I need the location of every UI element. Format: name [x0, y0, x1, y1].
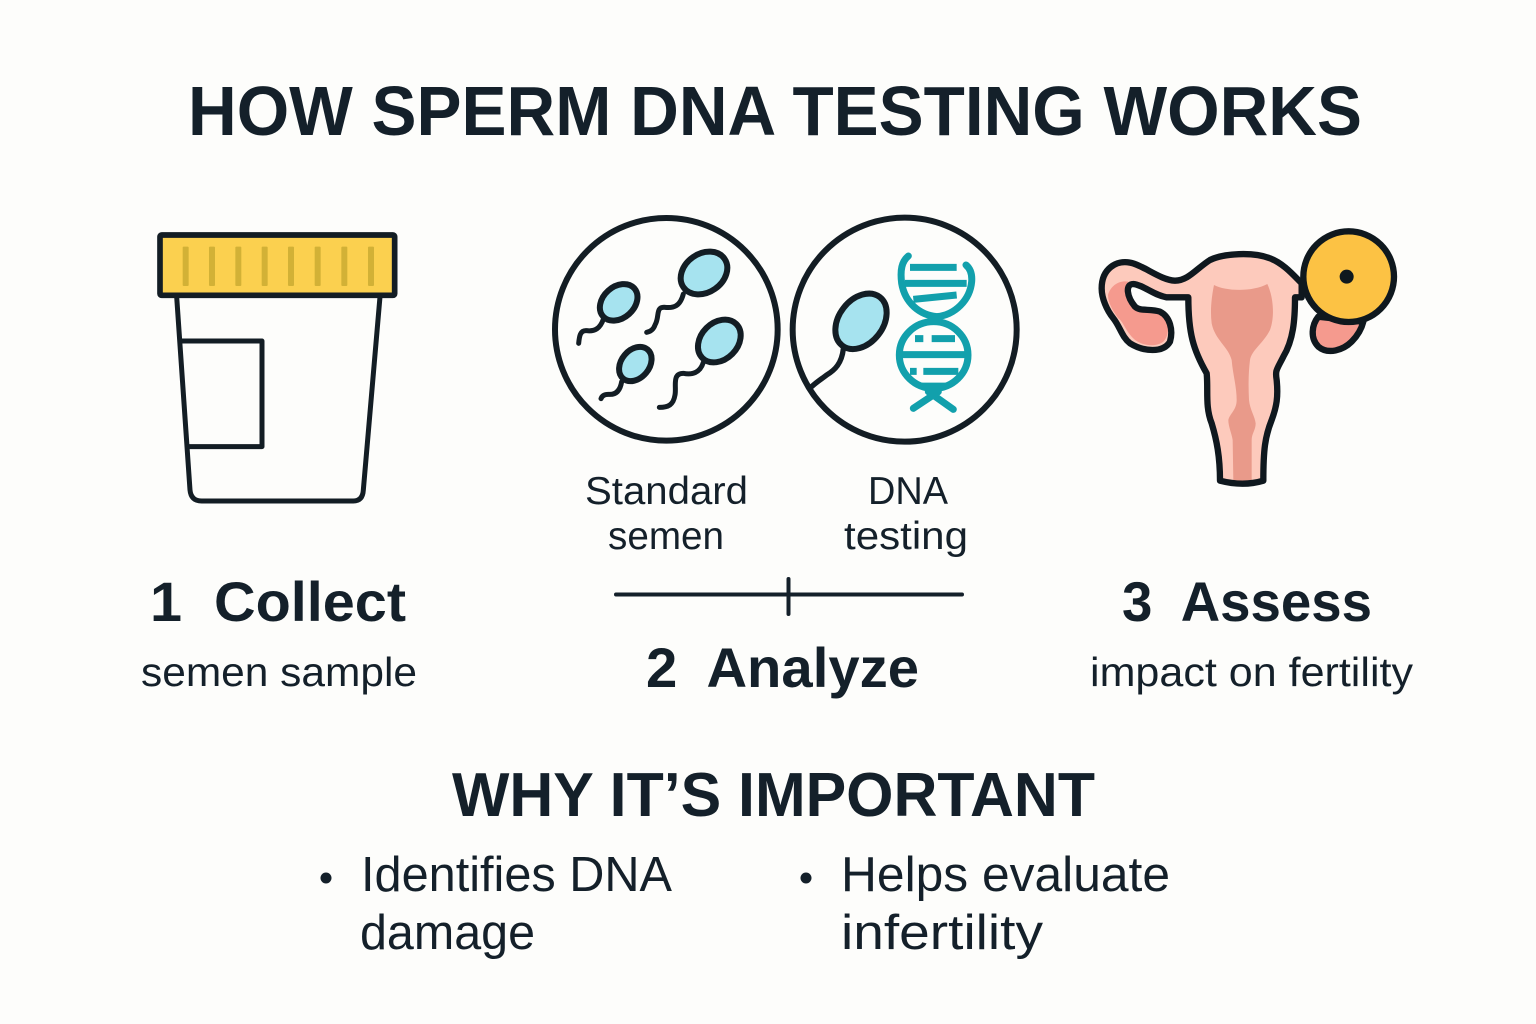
heading: why it's important: WHY IT’S IMPORTANT [452, 761, 1095, 830]
label: standard semen: Standard [585, 470, 748, 513]
title: HOW SPERM DNA TESTING WORKS [188, 72, 1362, 150]
step 2: analyze [555, 218, 1017, 699]
icon: uterus with highlighted ovary [1102, 231, 1394, 484]
label: DNA testing: DNA [868, 470, 948, 513]
step 1 heading: 1 Collect [150, 570, 406, 633]
bullet: identifies DNA damage: Identifies DNA [361, 848, 672, 902]
bullet: helps evaluate infertility [800, 848, 1170, 960]
label: standard semen: semen [608, 515, 724, 558]
step 3 heading: 3 Assess [1122, 570, 1372, 633]
step 3: assess [1090, 231, 1414, 695]
bullet: helps evaluate infertility: infertility [841, 906, 1044, 960]
step 1: collect [141, 235, 417, 695]
step 2 heading: 2 Analyze [646, 636, 919, 699]
label: standard semen [585, 470, 748, 558]
label: DNA testing: testing [844, 515, 968, 558]
icon: specimen cup [160, 235, 395, 501]
icon: DNA testing circle [793, 218, 1017, 442]
bullet: identifies DNA damage [320, 848, 672, 960]
step 1 caption: semen sample [141, 649, 417, 695]
bracket line [616, 579, 962, 614]
label: DNA testing [844, 470, 968, 558]
bullet: identifies DNA damage: damage [360, 906, 535, 960]
bullet: helps evaluate infertility: Helps evaluate [841, 848, 1170, 902]
step 3 caption: impact on fertility [1090, 649, 1414, 695]
icon: standard semen circle [555, 218, 778, 441]
